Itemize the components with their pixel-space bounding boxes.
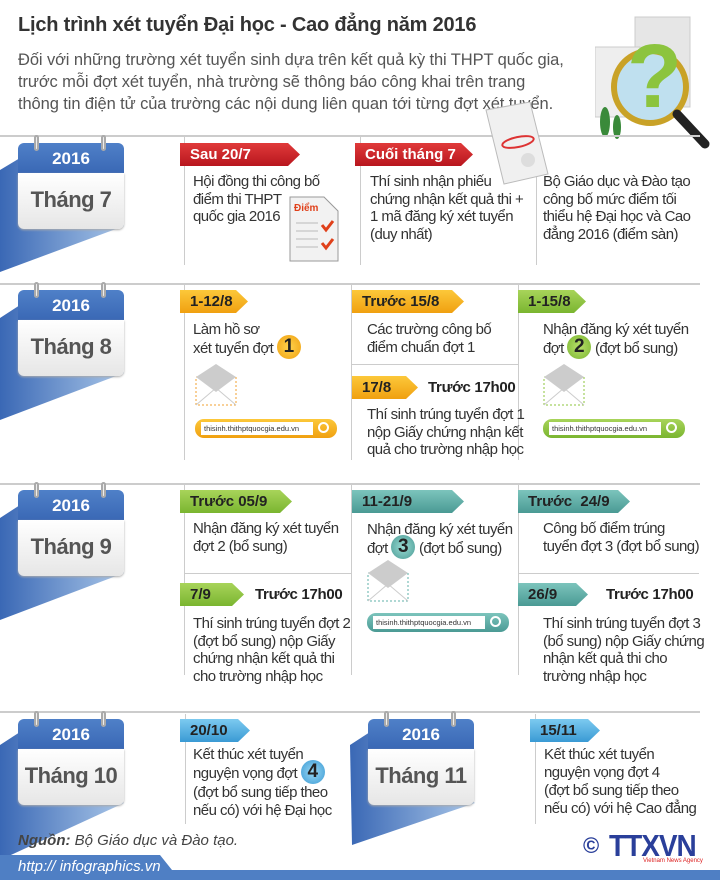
row 7 col1 (180, 143, 338, 262)
row 9 col3 (518, 490, 704, 684)
row 7 col3: đẳng 2016 (điểm sàn) (543, 226, 678, 242)
ribbon: 17/8: 17/8 (362, 379, 391, 396)
footer url: http:// infographics.vn (18, 858, 161, 875)
calendar: Tháng 7: Tháng 7 (31, 187, 111, 212)
row 9 col1: đợt 2 (bổ sung) (193, 538, 287, 554)
row 7 col1: Hội đồng thi công bố (193, 173, 320, 190)
row 10 col1: (đợt bổ sung tiếp theo (193, 784, 328, 801)
icon: envelope (544, 364, 584, 406)
row 10 col2: (đợt bổ sung tiếp theo (544, 782, 679, 799)
ribbon: Trước 05/9 (180, 490, 292, 513)
icon: score sheet (290, 196, 338, 262)
row 8 col3: Nhận đăng ký xét tuyển (543, 321, 689, 338)
ribbon: 15/11: 15/11 (540, 722, 577, 739)
row 7 col2 (355, 143, 524, 242)
ribbon: 17/8 (352, 376, 418, 399)
row 9 col1: (đợt bổ sung) nộp Giấy (193, 632, 335, 650)
row 8 col1: Làm hồ sơ (193, 321, 260, 338)
row 8 col3: đợt (đợt bổ sung) (543, 340, 678, 357)
calendar: Tháng 10: 2016 (52, 725, 90, 744)
search bar: thisinh.thithptquocgia.edu.vn (376, 618, 471, 627)
row 8 col2: quả cho trường nhập học (367, 441, 524, 458)
intro text (18, 51, 564, 113)
row 9 col1: cho trường nhập học (193, 668, 323, 684)
search bar (367, 613, 509, 632)
row 8 col2: nộp Giấy chứng nhận kết (367, 424, 523, 440)
search bar (195, 419, 337, 438)
search bar (543, 419, 685, 438)
search bar: thisinh.thithptquocgia.edu.vn (552, 424, 647, 433)
ribbon: Trước 24/9 (518, 490, 630, 513)
row 9 col1: Trước 17h00 (255, 586, 342, 603)
intro text: thông tin điện tử của trường các nội dung liên quan tới từng đợt xét tuyển. (18, 95, 553, 113)
ribbon: 7/9: 7/9 (190, 586, 211, 603)
row 9 col3: nhận kết quả thi cho (543, 650, 667, 667)
row 7 col1: điểm thi THPT (193, 190, 281, 208)
row 7 col2: 1 mã đăng ký xét tuyển (370, 208, 513, 225)
logo TTXVN (583, 828, 703, 864)
row 8 col3: 2 (574, 336, 585, 357)
row 9 col1: chứng nhận kết quả thi (193, 650, 334, 667)
ribbon: Trước 24/9: Trước 24/9 (528, 493, 610, 510)
row 10 col2 (530, 719, 696, 817)
icon: envelope (196, 364, 236, 406)
row 9 col2: 3 (398, 536, 409, 557)
row 7 col2: chứng nhận kết quả thi + (370, 190, 523, 208)
ribbon: Sau 20/7: Sau 20/7 (190, 146, 251, 163)
ribbon: 11-21/9 (352, 490, 464, 513)
row 8 col1: 1 (284, 336, 294, 357)
search bar: thisinh.thithptquocgia.edu.vn (204, 424, 299, 433)
ribbon: Cuối tháng 7 (355, 143, 473, 166)
row 8 col2 (352, 290, 524, 458)
row 7 col2: (duy nhất) (370, 226, 432, 242)
intro text: trước mỗi đợt xét tuyển, nhà trường sẽ thông báo công khai trên trang (18, 73, 525, 91)
row 9 col3: trường nhập học (543, 668, 646, 684)
row 9 col1 (180, 490, 350, 684)
logo TTXVN: © (583, 833, 599, 858)
dividers (184, 137, 185, 265)
ribbon: 1-15/8 (518, 290, 586, 313)
row 10 col1 (180, 719, 332, 819)
ribbon: 1-15/8: 1-15/8 (528, 293, 571, 310)
calendar: Tháng 7 (16, 135, 126, 232)
row 8 col2: Trước 17h00 (428, 379, 515, 396)
row 9 col1: Nhận đăng ký xét tuyển (193, 520, 339, 537)
calendar: Tháng 9 (16, 482, 126, 578)
row 9 col3: Thí sinh trúng tuyển đợt 3 (543, 615, 700, 632)
logo TTXVN: Vietnam News Agency (643, 858, 703, 864)
calendar: Tháng 10 (16, 711, 126, 808)
ribbon: Cuối tháng 7: Cuối tháng 7 (365, 146, 456, 163)
row 8 col1 (180, 290, 337, 438)
ribbon: 20/10 (180, 719, 250, 742)
row 7 col3: công bố mức điểm tối (543, 190, 676, 208)
row 7 col2: Thí sinh nhận phiếu (370, 173, 491, 190)
ribbon: 1-12/8: 1-12/8 (190, 293, 233, 310)
source: Nguồn: Bộ Giáo dục và Đào tạo. (18, 832, 238, 849)
calendar: Tháng 11 (366, 711, 476, 808)
ribbon: 26/9 (518, 583, 588, 606)
calendar: Tháng 8 (16, 282, 126, 378)
row 9 col1: Thí sinh trúng tuyển đợt 2 (193, 615, 350, 632)
row 9 col3: Trước 17h00 (606, 586, 693, 603)
calendar: Tháng 8: 2016 (52, 296, 90, 315)
ribbon: 11-21/9: 11-21/9 (362, 493, 412, 510)
row 10 col1: 4 (308, 761, 318, 782)
row 9 col2: đợt (đợt bổ sung) (367, 540, 502, 557)
icon: magnifier with question mark: ? (627, 27, 682, 127)
ribbon: 1-12/8 (180, 290, 248, 313)
row 8 col1: xét tuyển đợt (193, 340, 273, 357)
row lines (0, 135, 700, 137)
row 9 col2 (352, 490, 513, 632)
row 7 col3: thiểu hệ Đại học và Cao (543, 208, 690, 225)
row 7 col3: Bộ Giáo dục và Đào tạo (543, 173, 690, 190)
ribbon: Trước 05/9: Trước 05/9 (190, 493, 267, 510)
title: Lịch trình xét tuyển Đại học - Cao đẳng năm 2016 (18, 14, 476, 36)
row 8 col2: điểm chuẩn đợt 1 (367, 338, 475, 356)
row 10 col2: nguyện vọng đợt 4 (544, 764, 660, 781)
ribbon: 7/9 (180, 583, 244, 606)
row 9 col3: Công bố điểm trúng (543, 520, 665, 537)
calendar: Tháng 10: Tháng 10 (25, 763, 117, 788)
row 8 col3 (518, 290, 689, 438)
ribbon: Trước 15/8 (352, 290, 464, 313)
icon: certificate paper (486, 102, 548, 185)
ribbon: Sau 20/7 (180, 143, 300, 166)
icon: score sheet: Điểm (294, 202, 319, 214)
row 8 col2: Các trường công bố (367, 321, 491, 338)
row 9 col3: tuyển đợt 3 (đợt bổ sung) (543, 538, 699, 554)
ribbon: Trước 15/8: Trước 15/8 (362, 293, 439, 310)
row 9 col2: Nhận đăng ký xét tuyển (367, 521, 513, 538)
row 10 col2: nếu có) với hệ Cao đẳng (544, 800, 696, 817)
row 10 col1: nguyện vọng đợt (193, 765, 297, 782)
row 8 col2: Thí sinh trúng tuyển đợt 1 (367, 406, 524, 423)
icon: envelope (368, 560, 408, 602)
calendar: Tháng 9: Tháng 9 (31, 534, 111, 559)
calendar: Tháng 8: Tháng 8 (31, 334, 111, 359)
logo TTXVN: TTXVN (609, 828, 696, 862)
row 7 col3 (543, 173, 690, 242)
row 9 col3: (bổ sung) nộp Giấy chứng (543, 632, 704, 650)
icon: magnifier with question mark (595, 16, 710, 148)
row 10 col1: Kết thúc xét tuyển (193, 746, 303, 763)
calendar: Tháng 11: 2016 (402, 725, 440, 744)
ribbon: 26/9: 26/9 (528, 586, 557, 603)
row 7 col1: quốc gia 2016 (193, 208, 280, 225)
calendar: Tháng 7: 2016 (52, 149, 90, 168)
row 10 col1: nếu có) với hệ Đại học (193, 802, 332, 819)
calendar: Tháng 11: Tháng 11 (375, 763, 467, 788)
calendar: Tháng 9: 2016 (52, 496, 90, 515)
ribbon: 20/10: 20/10 (190, 722, 228, 739)
row 10 col2: Kết thúc xét tuyển (544, 746, 654, 763)
ribbon: 15/11 (530, 719, 600, 742)
intro text: Đối với những trường xét tuyển sinh dựa trên kết quả kỳ thi THPT quốc gia, (18, 51, 564, 69)
